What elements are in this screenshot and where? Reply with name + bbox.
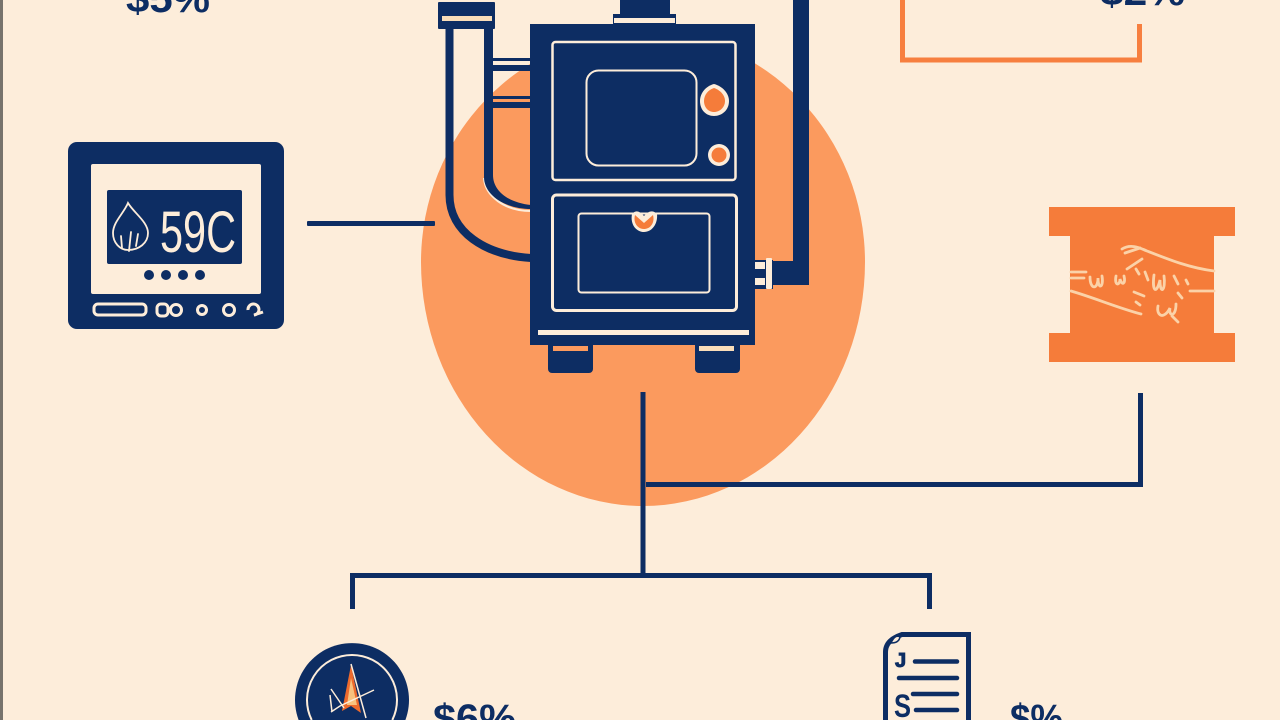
upper window xyxy=(586,70,696,166)
connector: thermostat to furnace xyxy=(307,221,435,226)
orange bracket connector xyxy=(902,0,1140,60)
icon: checklist document xyxy=(886,634,968,720)
flue coupling xyxy=(755,258,773,289)
lower panel xyxy=(552,195,736,310)
thermostat dots xyxy=(144,270,205,280)
document lines xyxy=(899,662,957,710)
chimney xyxy=(613,0,676,24)
icon: orange heat exchanger block xyxy=(1049,207,1235,362)
document symbols: J xyxy=(895,650,906,672)
orange background circle xyxy=(421,32,865,506)
icon: furnace xyxy=(438,0,809,373)
thermostat controls xyxy=(94,304,263,316)
icon: thermostat xyxy=(68,142,284,329)
left outer pipe xyxy=(450,26,531,258)
left inner pipe highlight xyxy=(484,178,531,211)
thermostat temperature reading: 59C xyxy=(160,200,236,265)
thermostat flame glyph xyxy=(113,203,148,251)
connector tree: lower branches xyxy=(352,392,1140,609)
icon: compass gauge xyxy=(295,643,409,720)
knob: small xyxy=(708,144,730,166)
pipe cross connectors xyxy=(492,58,532,108)
door flame badge xyxy=(632,211,657,232)
upper panel xyxy=(552,42,736,180)
lower door xyxy=(578,214,710,292)
furnace base strip xyxy=(538,330,749,335)
knob: large xyxy=(700,84,729,116)
cracked pipe lines xyxy=(1071,246,1214,322)
right flue pipe xyxy=(773,0,809,285)
left inner pipe xyxy=(484,26,531,209)
furnace body xyxy=(530,24,755,345)
furnace feet xyxy=(548,340,740,373)
pipe cap xyxy=(438,2,495,29)
